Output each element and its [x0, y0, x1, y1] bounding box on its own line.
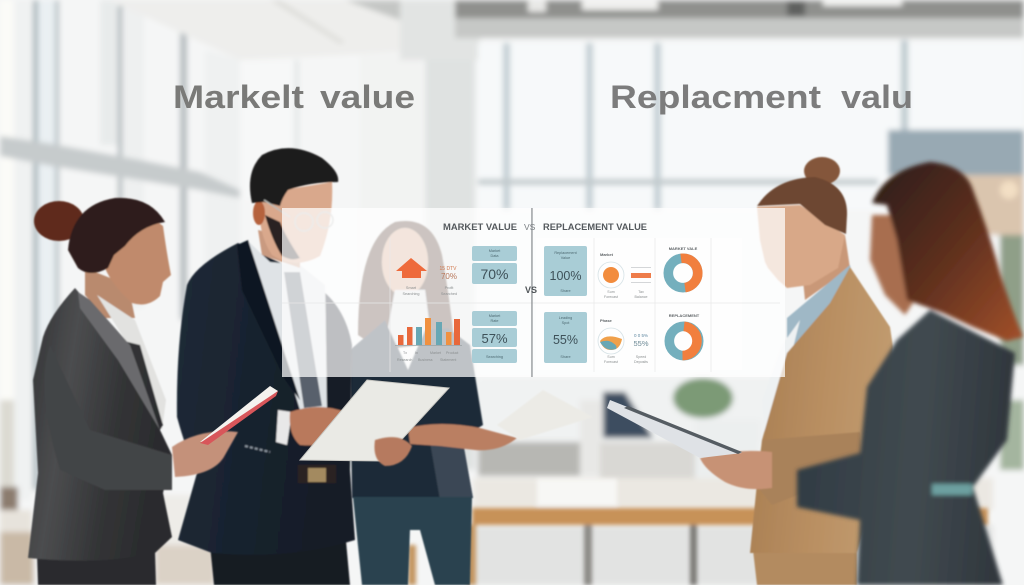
stat: 55% small: Speed	[636, 355, 646, 359]
stat box: 57%	[472, 328, 517, 347]
stat: 55% small: Deposits	[634, 360, 648, 364]
face	[258, 182, 332, 263]
person: woman with auburn hair	[797, 162, 1023, 585]
stat card: 55%: 55%	[553, 333, 578, 347]
conference table	[408, 479, 988, 585]
bar chart: Product	[446, 351, 458, 355]
hair	[757, 177, 847, 234]
shirt	[247, 240, 327, 410]
icon: mixed gauge: Phase	[600, 318, 613, 323]
stat card: 100%: Value	[561, 256, 570, 260]
icon: house: Searching	[402, 292, 420, 296]
bar chart: Statement	[440, 358, 456, 362]
skirt	[37, 550, 156, 585]
stat card: 55%: Share	[560, 355, 571, 359]
bar chart: In	[415, 351, 418, 355]
heading: market value: value	[320, 79, 415, 115]
jacket	[750, 267, 893, 553]
icon: orange bar indicator	[631, 267, 651, 299]
donut chart: market value	[668, 246, 698, 288]
lapel	[237, 240, 300, 400]
stat: house share: Searched	[441, 292, 457, 296]
stat box: market label: Market	[489, 249, 501, 253]
stat box: market label: Data	[490, 254, 499, 258]
bar chart: Business	[418, 358, 433, 362]
blouse	[787, 265, 852, 345]
beard	[265, 215, 300, 260]
hand	[290, 407, 355, 445]
person: center woman behind panel	[350, 221, 517, 585]
stat box: market label	[472, 246, 517, 261]
skirt	[753, 550, 857, 585]
icon: house: Smart	[406, 286, 417, 290]
person: woman in grey blazer	[28, 198, 238, 585]
stat card: 100%: 100%	[550, 269, 581, 283]
face	[105, 220, 171, 304]
hand	[700, 451, 772, 489]
stat box: 70%	[472, 263, 517, 284]
stat: house share	[440, 266, 457, 296]
icon: orange gauge: Market	[600, 252, 614, 257]
stat: 55% small: 0 0 5%	[634, 333, 648, 338]
heading: market value: Markelt	[173, 79, 304, 115]
stat box: footer label	[472, 349, 517, 363]
icon: mixed gauge: Sum	[607, 355, 615, 359]
panel background	[282, 208, 785, 377]
label: center vs: VS	[525, 285, 537, 295]
hair	[68, 198, 165, 273]
heading: replacement value: Replacment	[610, 79, 821, 115]
heading: replacement value: valu	[841, 79, 913, 115]
tie	[284, 272, 322, 408]
belt	[298, 465, 336, 483]
ear	[253, 201, 265, 225]
icon: orange bar indicator: Balance	[634, 295, 648, 299]
neck	[800, 235, 850, 300]
icon: orange bar indicator: Tax	[638, 290, 644, 294]
stat box: footer label: Searching	[486, 355, 503, 359]
trousers	[210, 530, 350, 585]
sleeve	[44, 345, 172, 490]
stat: 55% small	[633, 333, 649, 364]
hand	[172, 431, 238, 477]
right panel whitening	[536, 238, 742, 370]
bar chart: Tx	[403, 351, 407, 355]
icon: orange gauge: Sum	[607, 290, 615, 294]
stat card: 55%: Leading	[559, 316, 572, 320]
face	[870, 215, 915, 315]
icon: mixed gauge	[598, 318, 624, 364]
stat box: secondary label	[472, 311, 517, 326]
icon: red notebook	[200, 386, 278, 445]
shirt	[97, 295, 166, 430]
stat card: 55%	[544, 312, 587, 363]
stat card: 100%: Share	[560, 289, 571, 293]
donut chart: market value: MARKET VALE	[669, 246, 698, 251]
sheet of paper: center woman	[497, 390, 593, 440]
hair	[250, 148, 338, 206]
icon: tablet	[607, 400, 742, 458]
stat card: 100%	[544, 246, 587, 296]
stat: house share: 70%	[441, 272, 457, 281]
icon: orange gauge: Forecast	[604, 295, 618, 299]
bar chart: Research	[397, 358, 412, 362]
neck	[85, 268, 135, 318]
stat: house share: 15 DTV	[440, 266, 457, 272]
stat card: 100%: Replacement	[554, 251, 578, 255]
face	[757, 205, 845, 288]
person: woman in tan blazer	[700, 157, 893, 585]
jacket	[797, 310, 1015, 585]
sleeve buttons	[245, 446, 270, 452]
title: market value: MARKET VALUE	[443, 222, 517, 232]
stat box: secondary label: Market	[489, 314, 501, 318]
heading: market value	[173, 79, 415, 115]
sleeve	[760, 432, 862, 505]
donut chart: replacement value	[669, 313, 700, 356]
bar chart: Market	[430, 351, 441, 355]
stat box: 70%: 70%	[480, 266, 509, 282]
undershirt	[762, 320, 800, 440]
neck	[258, 230, 300, 268]
hair	[872, 162, 1023, 341]
person: man in navy suit	[177, 148, 355, 585]
comparison panel	[282, 208, 785, 377]
bun	[804, 157, 840, 185]
bun	[34, 201, 84, 241]
stat box: secondary label: Rate	[490, 319, 499, 323]
heading: replacement value	[610, 79, 913, 115]
donut chart: replacement value: REPLACEMENT	[669, 313, 700, 318]
title: replacement value: REPLACEMENT VALUE	[543, 222, 647, 232]
icon: man's second hand	[374, 437, 412, 466]
bar chart	[395, 318, 462, 362]
stat: house share: Profit	[445, 286, 454, 290]
jacket	[177, 243, 355, 555]
jacket	[28, 288, 172, 561]
left cell grid	[282, 238, 780, 372]
icon: orange gauge	[598, 252, 624, 299]
stat: 55% small: 55%	[633, 339, 649, 348]
icon: house	[396, 258, 427, 296]
belt	[932, 484, 972, 495]
stat box: 57%: 57%	[481, 331, 508, 346]
stat card: 55%: Spot	[562, 321, 570, 325]
label: top vs: VS	[524, 222, 536, 232]
sheet of paper: man	[300, 380, 449, 461]
cuff	[276, 410, 292, 445]
center divider	[531, 208, 533, 377]
lapel	[78, 292, 160, 430]
glasses	[264, 200, 333, 231]
icon: mixed gauge: Forecast	[604, 360, 618, 364]
